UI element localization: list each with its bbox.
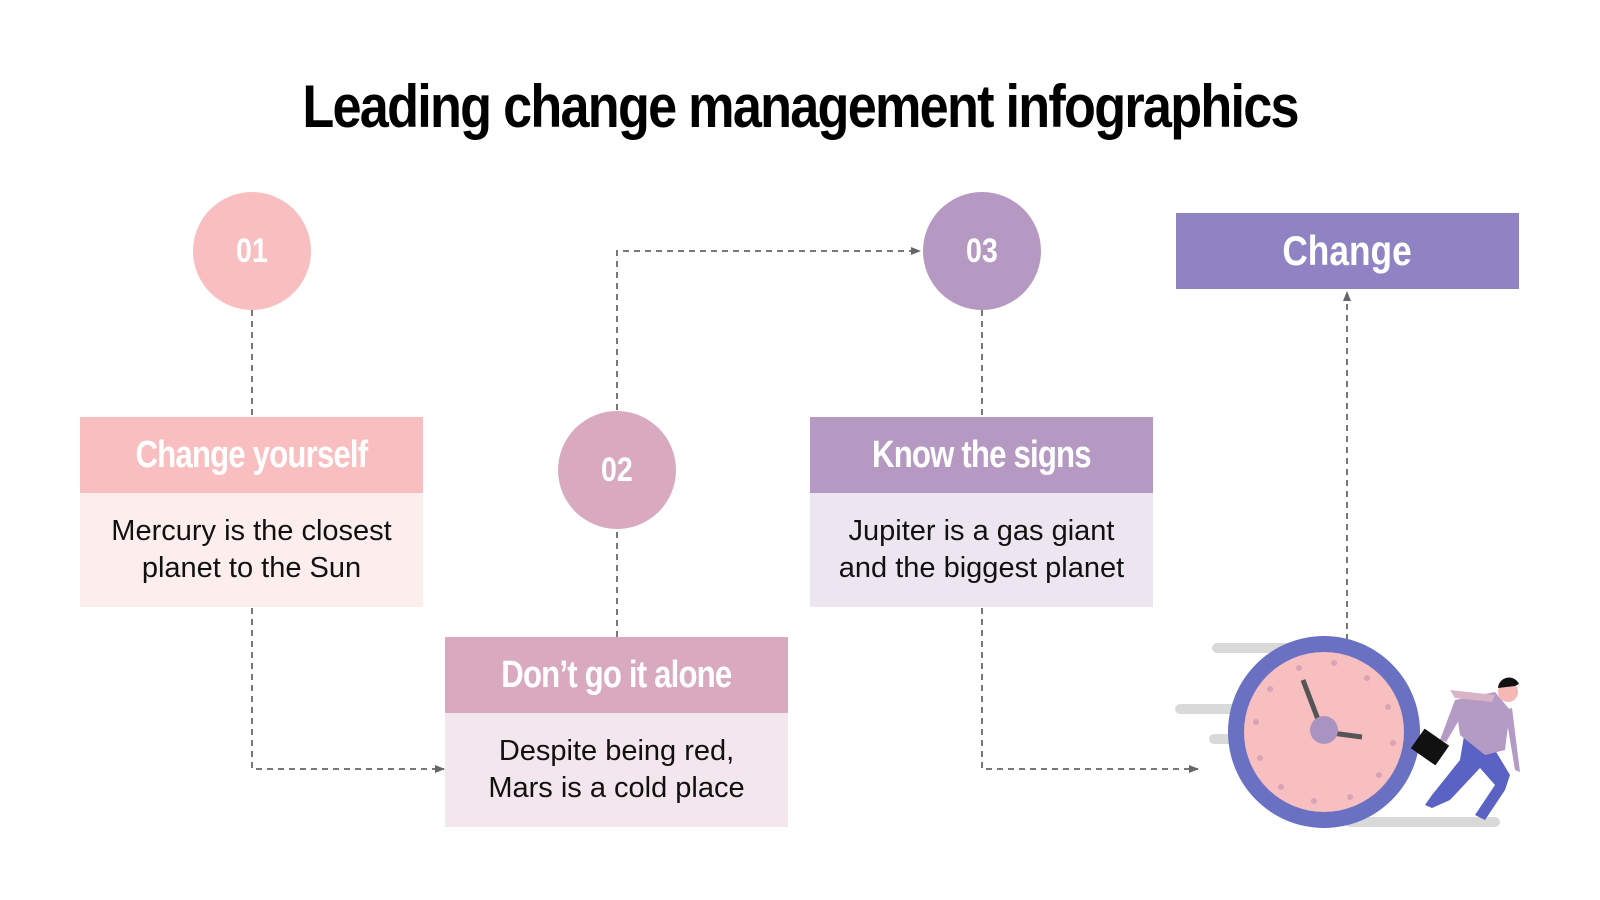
box: change yourself: planet to the Sun xyxy=(142,552,361,584)
circle 02 xyxy=(558,411,676,529)
box: change yourself: Mercury is the closest xyxy=(111,515,392,547)
circle 03 xyxy=(923,192,1041,310)
change box: Change xyxy=(1283,227,1412,274)
box: change yourself: Change yourself xyxy=(136,434,367,476)
box: don't go it alone xyxy=(445,637,788,827)
illustration: clock and running man xyxy=(1175,636,1520,828)
box: change yourself xyxy=(80,417,423,607)
circle 02: 02 xyxy=(601,450,633,488)
box: know the signs: Jupiter is a gas giant xyxy=(848,515,1114,547)
circle 01 xyxy=(193,192,311,310)
box: know the signs: and the biggest planet xyxy=(839,552,1124,584)
circle 01: 01 xyxy=(236,232,268,270)
box: don't go it alone: Don’t go it alone xyxy=(501,654,732,696)
box: don't go it alone: Mars is a cold place xyxy=(488,772,745,804)
box: know the signs: Know the signs xyxy=(872,434,1091,476)
circle 03: 03 xyxy=(966,232,998,270)
title: Leading change management infographics xyxy=(302,73,1298,140)
box: don't go it alone: Despite being red, xyxy=(499,735,734,767)
change box xyxy=(1176,213,1519,289)
box: know the signs xyxy=(810,417,1153,607)
